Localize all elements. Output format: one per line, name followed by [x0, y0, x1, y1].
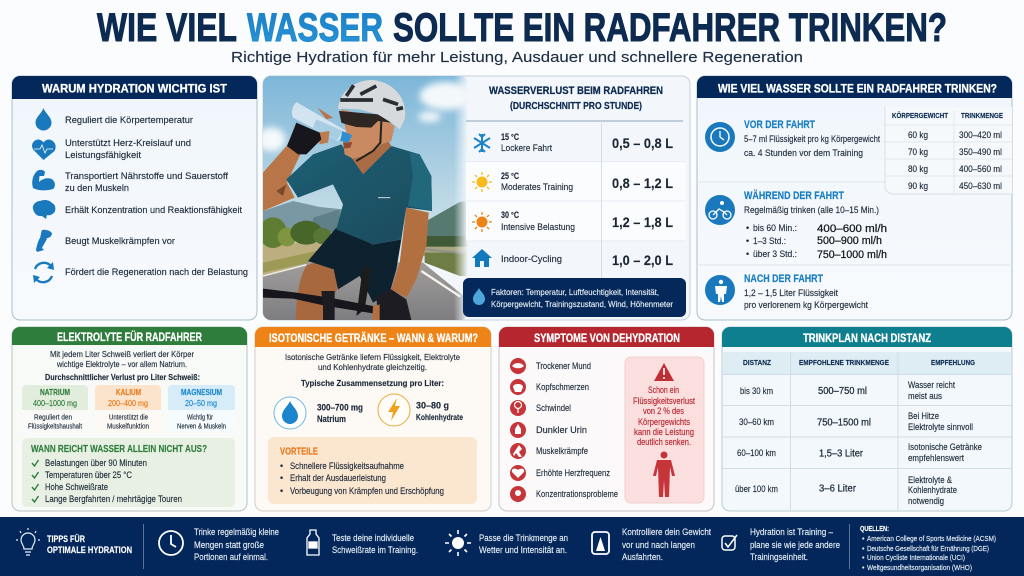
- card: natrium: [22, 385, 88, 432]
- title: WIE VIEL: [97, 6, 237, 50]
- table: water loss: 1,0 – 2,0 L: [612, 252, 673, 268]
- table: water loss: 0,8 – 1,2 L: [612, 175, 673, 191]
- table: distance plan: Elektrolyte sinnvoll: [908, 422, 973, 432]
- table: distance plan: 60–100 km: [737, 448, 776, 458]
- section: waehrend der fahrt: über 3 Std.:: [753, 249, 797, 259]
- heading: wasserverlust: (DURCHSCHNITT PRO STUNDE): [510, 101, 642, 112]
- intro text: [285, 352, 460, 388]
- tip: small portions: Portionen auf einmal.: [194, 552, 268, 562]
- section: vor der fahrt: ca. 4 Stunden vor dem Training: [744, 148, 863, 158]
- callout: 2 percent warning: von 2 % des: [643, 406, 684, 416]
- stat: kohlenhydrate: Kohlenhydrate: [416, 412, 463, 422]
- table: body weight: TRINKMENGE: [961, 113, 1003, 120]
- heading: ISOTONISCHE GETRÄNKE – WANN & WARUM?: [269, 330, 478, 345]
- card: natrium: Flüssigkeitshaushalt: [28, 424, 82, 430]
- section: waehrend der fahrt: WÄHREND DER FAHRT: [744, 189, 844, 202]
- panel: isotonische getraenke: [255, 327, 491, 511]
- table: distance plan: empfehlenswert: [908, 453, 964, 463]
- callout: vorteile: •: [280, 473, 283, 483]
- table: water loss: Intensive Belastung: [501, 222, 575, 232]
- intro text: [45, 349, 200, 382]
- callout: vorteile: [268, 437, 477, 504]
- tip: weight: [622, 527, 711, 562]
- tip: training: plane sie wie jede andere: [750, 540, 840, 550]
- table: body weight: 350–490 ml: [959, 147, 1002, 157]
- tip: weight: Kontrolliere dein Gewicht: [622, 527, 711, 537]
- callout: faktoren: Faktoren: Temperatur, Luftfeuchtigkeit, Intensität,: [491, 287, 659, 297]
- table: distance plan: bis 30 km: [740, 386, 773, 396]
- section: waehrend der fahrt: •: [746, 249, 749, 259]
- tip: training: [750, 527, 840, 562]
- intro text: und Kohlenhydrate gleichzeitig.: [318, 362, 427, 372]
- table: body weight: 400–560 ml: [959, 164, 1002, 174]
- footer: tips bar: [0, 517, 1024, 576]
- icon: bottle: [307, 530, 319, 555]
- callout: wann reicht wasser nicht: Belastungen über 90 Minuten: [45, 458, 147, 468]
- table: distance plan: Kohlenhydrate: [908, 485, 957, 495]
- table: water loss: Moderates Training: [501, 182, 573, 192]
- tip: sweat rate: [332, 533, 418, 555]
- section: waehrend der fahrt: 400–600 ml/h: [817, 223, 887, 235]
- reason list: Erhält Konzentration und Reaktionsfähigkeit: [65, 205, 243, 215]
- callout: faktoren: [463, 278, 686, 317]
- callout: vorteile: VORTEILE: [280, 446, 318, 458]
- stat: natrium: Natrium: [317, 414, 346, 424]
- reason list: Beugt Muskelkrämpfen vor: [65, 236, 175, 246]
- heading: SYMPTOME VON DEHYDRATION: [534, 331, 680, 345]
- table: water loss: 30 °C: [501, 210, 519, 220]
- table: body weight: [885, 107, 1012, 194]
- section: nach der fahrt: pro verlorenem kg Körpergewicht: [744, 300, 868, 310]
- table: body weight: KÖRPERGEWICHT: [892, 111, 949, 120]
- callout: vorteile: Schnellere Flüssigkeitsaufnahme: [290, 461, 404, 471]
- table: body weight: 90 kg: [908, 181, 928, 191]
- card: natrium: 400–1000 mg: [33, 398, 77, 408]
- tip: training: Hydration ist Training –: [750, 527, 833, 537]
- section: waehrend der fahrt: bis 60 Min.:: [753, 223, 797, 233]
- section: nach der fahrt: 1,2 – 1,5 Liter Flüssigkeit: [744, 288, 838, 298]
- icon: checkbox: [722, 535, 737, 550]
- icon: natrium drop: [274, 397, 306, 429]
- callout: vorteile: •: [280, 461, 283, 471]
- section: waehrend der fahrt: 750–1000 ml/h: [817, 249, 887, 261]
- callout: wann reicht wasser nicht: Hohe Schweißrate: [45, 482, 108, 492]
- tip: weather: Wetter und Intensität an.: [479, 545, 567, 555]
- table: water loss: 25 °C: [501, 171, 519, 181]
- table: distance plan: meist aus: [908, 391, 942, 401]
- section: vor der fahrt: [705, 119, 880, 158]
- callout: 2 percent warning: [625, 357, 704, 503]
- icon: energy bolt: [378, 394, 410, 426]
- tip: weight: Ausfahrten.: [622, 552, 663, 562]
- heading: ELEKTROLYTE FÜR RADFAHRER: [57, 329, 202, 344]
- symptom icons: [510, 358, 526, 502]
- table: water loss: [466, 121, 685, 278]
- card: kalium: Unterstützt die: [109, 414, 148, 422]
- tip: training: Trainingseinheit.: [750, 552, 808, 562]
- table: distance plan: 500–750 ml: [818, 386, 867, 397]
- symptom list: Trockener Mund: [536, 361, 591, 371]
- callout: 2 percent warning: Körpergewichts: [638, 417, 690, 427]
- table: body weight: 450–630 ml: [959, 181, 1002, 191]
- tip: small portions: Trinke regelmäßig kleine: [194, 527, 279, 537]
- table: distance plan: 30–60 km: [739, 417, 774, 427]
- tip: sweat rate: Schweißrate im Training.: [332, 545, 418, 555]
- icon: regeneration arrows: [33, 262, 54, 283]
- table: body weight: 70 kg: [908, 147, 928, 157]
- table: water loss: Indoor-Cycling: [501, 254, 562, 264]
- tip: small portions: Mengen statt große: [194, 540, 264, 550]
- symptom list: Muskelkrämpfe: [536, 446, 588, 456]
- table: distance plan: notwendig: [908, 496, 944, 506]
- section: nach der fahrt: [705, 273, 868, 310]
- section: vor der fahrt: VOR DER FAHRT: [744, 119, 815, 131]
- panel: elektrolyte: [12, 327, 247, 511]
- reason list: Leistungsfähigkeit: [65, 150, 142, 160]
- table: distance plan: 3–6 Liter: [819, 484, 857, 494]
- symptom list: [536, 361, 618, 499]
- symptom list: Schwindel: [536, 403, 571, 413]
- sources: •: [862, 555, 865, 562]
- panel: wasserverlust container: [257, 76, 690, 320]
- callout: 2 percent warning: kann die Leistung: [634, 427, 694, 437]
- stat: natrium: [317, 402, 363, 424]
- table: distance plan: Isotonische Getränke: [908, 442, 982, 452]
- icon: sun: [445, 530, 471, 556]
- icon: hot sun: [472, 212, 492, 232]
- sources: •: [862, 546, 865, 553]
- title: WASSER: [247, 6, 383, 50]
- sources: [860, 526, 996, 572]
- section: waehrend der fahrt: 500–900 ml/h: [817, 235, 882, 247]
- tips heading: [47, 534, 132, 555]
- icon: flexed arm: [32, 170, 55, 190]
- panel: warum hydration wichtig ist: [12, 76, 257, 320]
- callout: 2 percent warning: deutlich senken.: [637, 437, 691, 447]
- icon: scale: [592, 532, 609, 554]
- panel: wie viel wasser: [697, 76, 1012, 320]
- table: distance plan: 750–1500 ml: [817, 418, 871, 428]
- table: water loss: 1,2 – 1,8 L: [612, 214, 673, 230]
- callout: wann reicht wasser nicht: Temperaturen über 25 °C: [45, 470, 132, 480]
- icon: house: [472, 249, 492, 267]
- sources: Weltgesundheitsorganisation (WHO): [867, 565, 972, 572]
- card: magnesium: Wichtig für: [187, 414, 214, 422]
- table: water loss: Lockere Fahrt: [501, 143, 552, 153]
- table: water loss: 0,5 – 0,8 L: [612, 135, 673, 151]
- card: kalium: KALIUM: [116, 388, 141, 397]
- intro text: wichtige Elektrolyte – vor allem Natrium.: [56, 359, 187, 369]
- icon: heart with pulse: [32, 139, 56, 160]
- card: kalium: Muskelfunktion: [107, 424, 149, 430]
- stat: kohlenhydrate: [416, 400, 463, 422]
- card: magnesium: [168, 385, 235, 432]
- intro text: Mit jedem Liter Schweiß verliert der Körper: [50, 349, 194, 359]
- tip: weather: [479, 533, 568, 555]
- section: waehrend der fahrt: [705, 189, 887, 261]
- stat: natrium: 300–700 mg: [317, 402, 363, 412]
- panel: trinkplan: [722, 327, 1012, 511]
- symptom list: Dunkler Urin: [536, 425, 587, 435]
- sources: Deutsche Gesellschaft für Ernährung (DGE): [867, 546, 989, 553]
- table: water loss: 15 °C: [501, 132, 519, 142]
- table: distance plan: EMPFEHLUNG: [931, 358, 975, 367]
- callout: wann reicht wasser nicht: [22, 438, 235, 507]
- tips heading: OPTIMALE HYDRATION: [47, 545, 132, 555]
- table: body weight: 300–420 ml: [959, 130, 1002, 140]
- icon: leg: [36, 230, 52, 252]
- callout: vorteile: •: [280, 486, 283, 496]
- icon: clock: [159, 531, 183, 555]
- title: [97, 6, 947, 50]
- section: nach der fahrt: NACH DER FAHRT: [744, 273, 823, 285]
- tip: weight: vor und nach langen: [622, 540, 695, 550]
- heading: wasserverlust: [489, 85, 663, 112]
- table: distance plan: DISTANZ: [743, 358, 771, 367]
- icon: brain: [33, 200, 55, 219]
- icon: snowflake: [474, 134, 490, 152]
- reason list: Transportiert Nährstoffe und Sauerstoff: [65, 171, 229, 181]
- icon: water drop: [36, 108, 52, 130]
- sources: American College of Sports Medicine (ACSM): [867, 536, 996, 543]
- sources: Union Cycliste Internationale (UCI): [867, 555, 965, 562]
- section: vor der fahrt: 5–7 ml Flüssigkeit pro kg Körpergewicht: [744, 134, 880, 144]
- reason list: Fördert die Regeneration nach der Belastung: [65, 267, 248, 277]
- tips heading: TIPPS FÜR: [47, 534, 85, 544]
- reason list: Reguliert die Körpertemperatur: [65, 115, 193, 125]
- table: distance plan: [735, 358, 982, 506]
- callout: wann reicht wasser nicht: WANN REICHT WASSER ALLEIN NICHT AUS?: [31, 443, 207, 455]
- icon: sun: [472, 172, 492, 192]
- table: body weight: 80 kg: [908, 164, 928, 174]
- intro text: Typische Zusammensetzung pro Liter:: [301, 378, 444, 388]
- subtitle: Richtige Hydration für mehr Leistung, Ausdauer und schnellere Regeneration: [231, 49, 803, 66]
- table: body weight: 60 kg: [908, 130, 928, 140]
- section: waehrend der fahrt: 1–3 Std.:: [753, 236, 786, 246]
- symptom list: Erhöhte Herzfrequenz: [536, 468, 610, 478]
- table: distance plan: Bei Hitze: [908, 411, 939, 421]
- section: waehrend der fahrt: •: [746, 223, 749, 233]
- table: distance plan: über 100 km: [735, 484, 778, 494]
- tip: weather: Passe die Trinkmenge an: [479, 533, 568, 543]
- section: waehrend der fahrt: Regelmäßig trinken (alle 10–15 Min.): [744, 205, 879, 215]
- section: waehrend der fahrt: •: [746, 236, 749, 246]
- callout: wann reicht wasser nicht: Lange Bergfahrten / mehrtägige Touren: [45, 494, 182, 504]
- card: magnesium: Nerven & Muskeln: [177, 424, 226, 430]
- card: kalium: [95, 385, 161, 432]
- reason list: Unterstützt Herz-Kreislauf und: [65, 138, 191, 148]
- heading: TRINKPLAN NACH DISTANZ: [803, 331, 931, 345]
- callout: faktoren: Körpergewicht, Trainingszustand, Wind, Höhenmeter: [491, 299, 673, 309]
- heading: WARUM HYDRATION WICHTIG IST: [42, 82, 228, 96]
- card: natrium: Reguliert den: [34, 414, 72, 422]
- callout: vorteile: Erhalt der Ausdauerleistung: [290, 473, 386, 483]
- symptom list: Konzentrationsprobleme: [536, 489, 618, 499]
- callout: 2 percent warning: Schon ein: [648, 385, 679, 395]
- stat: kohlenhydrate: 30–80 g: [416, 400, 449, 410]
- tip: sweat rate: Teste deine individuelle: [332, 533, 414, 543]
- callout: vorteile: Vorbeugung von Krämpfen und Erschöpfung: [290, 486, 444, 496]
- callout: 2 percent warning: Flüssigkeitsverlust: [633, 396, 695, 406]
- sources: •: [862, 565, 865, 572]
- reason list: zu den Muskeln: [65, 183, 129, 193]
- intro text: Durchschnittlicher Verlust pro Liter Schweiß:: [45, 372, 200, 382]
- panel: symptome: [499, 327, 714, 511]
- symptom list: Kopfschmerzen: [536, 382, 589, 392]
- sources: •: [862, 536, 865, 543]
- card: natrium: NATRIUM: [40, 388, 70, 397]
- tip: small portions: [194, 527, 279, 562]
- table: distance plan: 1,5–3 Liter: [819, 448, 864, 460]
- intro text: Isotonische Getränke liefern Flüssigkeit, Elektrolyte: [285, 352, 460, 362]
- reason list: [65, 115, 248, 277]
- card: kalium: 200–400 mg: [108, 398, 148, 408]
- table: distance plan: Elektrolyte &: [908, 475, 952, 485]
- photo: cyclist drinking: [257, 76, 473, 320]
- card: magnesium: 20–50 mg: [185, 398, 217, 408]
- sources: QUELLEN:: [860, 526, 889, 533]
- icon: light bulb: [16, 528, 40, 555]
- card: magnesium: MAGNESIUM: [181, 388, 222, 397]
- table: distance plan: Wasser reicht: [908, 380, 955, 390]
- table: distance plan: EMPFOHLENE TRINKMENGE: [799, 358, 889, 367]
- heading: wasserverlust: WASSERVERLUST BEIM RADFAHREN: [489, 85, 663, 97]
